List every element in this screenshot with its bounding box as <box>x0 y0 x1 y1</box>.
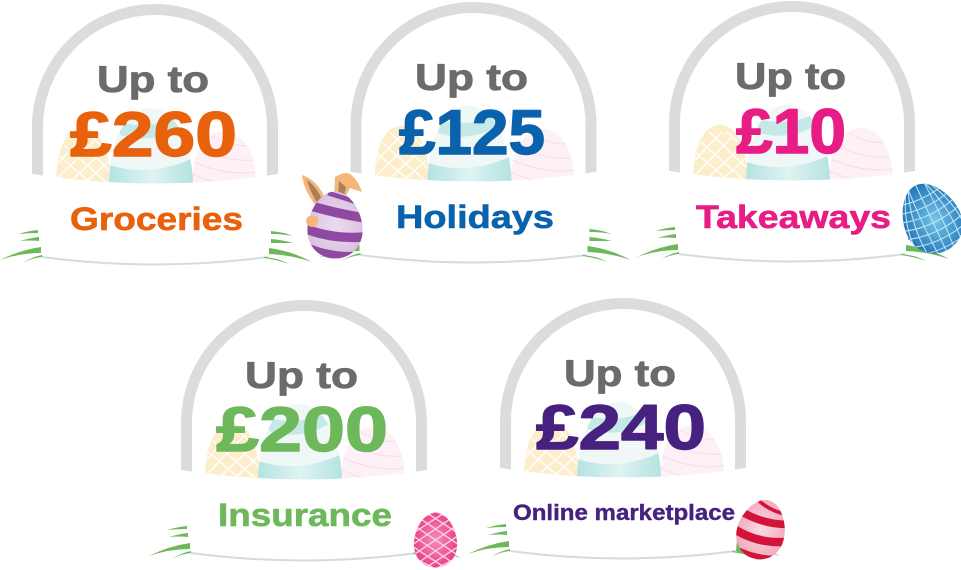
text: up to: Up to <box>245 355 358 396</box>
amount: 125 pounds: £125 <box>399 98 545 168</box>
panel: takeaways basket <box>637 7 949 261</box>
basket illustration <box>0 10 312 264</box>
icon: blue lattice egg <box>902 184 961 254</box>
icon: pink lattice egg <box>414 512 458 568</box>
panel: holidays basket <box>318 8 630 262</box>
amount: 10 pounds: £10 <box>736 97 846 167</box>
label: online marketplace: Online marketplace <box>513 500 735 525</box>
label: takeaways: Takeaways <box>696 199 891 235</box>
amount: 240 pounds: £240 <box>536 393 706 463</box>
panel: groceries basket <box>0 10 312 264</box>
text: up to: Up to <box>415 57 528 98</box>
panel: insurance basket <box>149 306 461 560</box>
basket illustration <box>318 8 630 262</box>
amount: 200 pounds: £200 <box>216 395 388 465</box>
text: up to: Up to <box>564 353 676 394</box>
icon: red striped egg <box>736 500 785 560</box>
label: holidays: Holidays <box>396 199 554 235</box>
text: up to: Up to <box>735 56 846 97</box>
amount: 260 pounds: £260 <box>70 100 237 170</box>
label: groceries: Groceries <box>70 201 243 237</box>
basket illustration <box>149 306 461 560</box>
basket illustration <box>637 7 949 261</box>
label: insurance: Insurance <box>218 497 392 533</box>
basket illustration <box>468 304 780 558</box>
panel: online marketplace basket <box>468 304 780 558</box>
text: up to: Up to <box>97 59 209 100</box>
icon: bunny with purple striped egg <box>302 173 366 258</box>
